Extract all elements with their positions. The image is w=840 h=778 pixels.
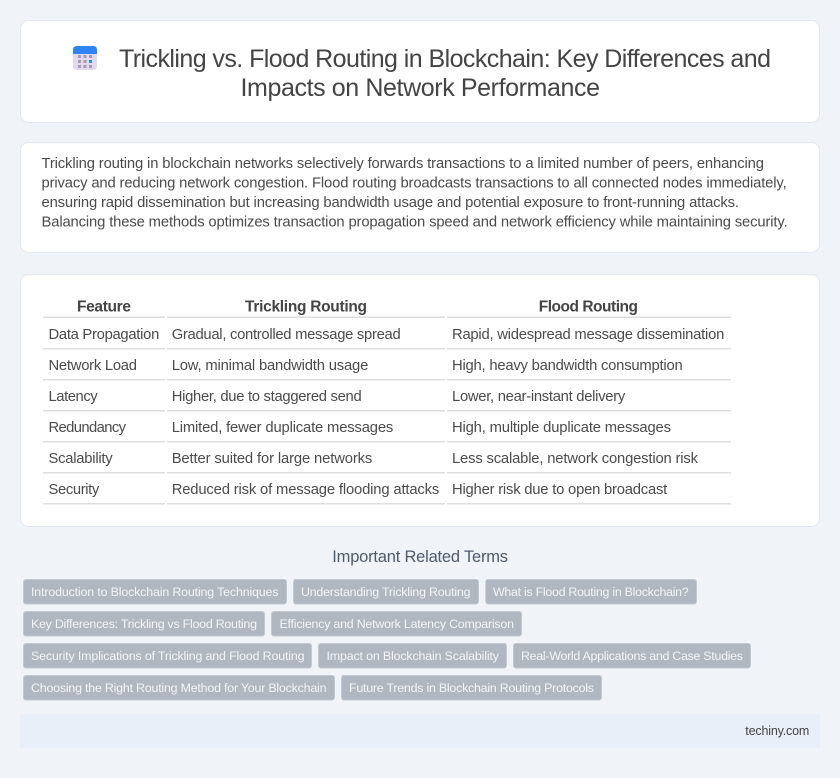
text block: intro: ensuring rapid dissemination but increasing bandwidth usage and potential exposure to front-running attacks. <box>42 195 739 211</box>
table row: Latency: Lower, near-instant delivery <box>452 389 626 405</box>
tag: Future Trends: Future Trends in Blockchain Routing Protocols <box>349 681 594 695</box>
table row: Security: Reduced risk of message flooding attacks <box>172 482 439 498</box>
table row: Redundancy: Redundancy <box>48 420 127 436</box>
tag: Real-World <box>514 644 750 668</box>
tag: Choosing <box>24 676 334 700</box>
text block: intro <box>42 156 788 230</box>
table row: Network Load: Low, minimal bandwidth usage <box>172 358 368 374</box>
table row: Data Propagation: Gradual, controlled message spread <box>172 327 401 343</box>
table row: Latency <box>43 389 731 412</box>
tag: Future Trends <box>342 676 602 700</box>
text block: intro: Trickling routing in blockchain networks selectively forwards transactions to a limited number of peers, enhancing <box>42 156 764 172</box>
tag: Key Differences: Key Differences: Trickling vs Flood Routing <box>31 617 257 631</box>
tag: Introduction: Introduction to Blockchain Routing Techniques <box>31 585 278 599</box>
tag: Impact on Scalability: Impact on Blockchain Scalability <box>326 649 500 663</box>
icon: calendar grid <box>73 46 97 70</box>
tag: Security Implications <box>24 644 312 668</box>
table row: Security <box>43 482 731 504</box>
panel: intro paragraph <box>20 142 820 252</box>
table row: Latency: Higher, due to staggered send <box>172 389 362 405</box>
tag: Security Implications: Security Implications of Trickling and Flood Routing <box>31 649 305 663</box>
table row: Scalability: Less scalable, network congestion risk <box>452 451 699 467</box>
tag: Efficiency <box>272 612 522 636</box>
table header <box>43 298 731 318</box>
title <box>119 45 771 102</box>
table row: Scalability: Scalability <box>48 451 113 467</box>
table row: Latency: Latency <box>48 389 98 405</box>
table row: Data Propagation <box>43 327 731 350</box>
tag list: related terms <box>24 580 750 700</box>
heading: related terms: Important Related Terms <box>332 548 508 566</box>
table row: Network Load: Network Load <box>48 358 137 374</box>
tag: Efficiency: Efficiency and Network Latency Comparison <box>280 617 514 631</box>
tag: Key Differences <box>24 612 264 636</box>
tag: Impact on Scalability <box>318 644 506 668</box>
footer: techiny.com <box>745 724 809 738</box>
text block: intro: Balancing these methods optimizes transaction propagation speed and network efficiency while maintaining security. <box>42 214 788 230</box>
table row: Network Load: High, heavy bandwidth consumption <box>452 358 683 374</box>
tag: Understanding <box>294 580 478 604</box>
title: Trickling vs. Flood Routing in Blockchain: Key Differences and <box>119 45 771 73</box>
footer <box>20 714 820 748</box>
tag: Understanding: Understanding Trickling Routing <box>301 585 471 599</box>
title: Impacts on Network Performance <box>240 74 600 102</box>
table header: Feature <box>77 298 131 316</box>
tag: Introduction <box>24 580 286 604</box>
table row: Security: Higher risk due to open broadcast <box>452 482 667 498</box>
table row: Redundancy: High, multiple duplicate messages <box>452 420 671 436</box>
table header: Trickling Routing <box>245 298 367 316</box>
table header: Flood Routing <box>539 298 638 316</box>
table row: Scalability: Better suited for large networks <box>172 451 372 467</box>
panel: comparison table <box>20 274 820 526</box>
table row: Data Propagation: Data Propagation <box>48 327 159 343</box>
panel: title header <box>20 20 820 122</box>
table row: Network Load <box>43 358 731 380</box>
text block: intro: privacy and reducing network congestion. Flood routing broadcasts transactions to all connected nodes immediately, <box>42 176 787 192</box>
table row: Redundancy <box>43 420 731 442</box>
table row: Security: Security <box>48 482 100 498</box>
tag: Choosing: Choosing the Right Routing Method for Your Blockchain <box>31 681 327 695</box>
tag: Real-World: Real-World Applications and Case Studies <box>521 649 743 663</box>
table row: Scalability <box>43 451 731 474</box>
table row: Redundancy: Limited, fewer duplicate messages <box>172 420 393 436</box>
tag: What is Flood Routing: What is Flood Routing in Blockchain? <box>493 585 689 599</box>
table row: Data Propagation: Rapid, widespread message dissemination <box>452 327 724 343</box>
tag: What is Flood Routing <box>486 580 696 604</box>
